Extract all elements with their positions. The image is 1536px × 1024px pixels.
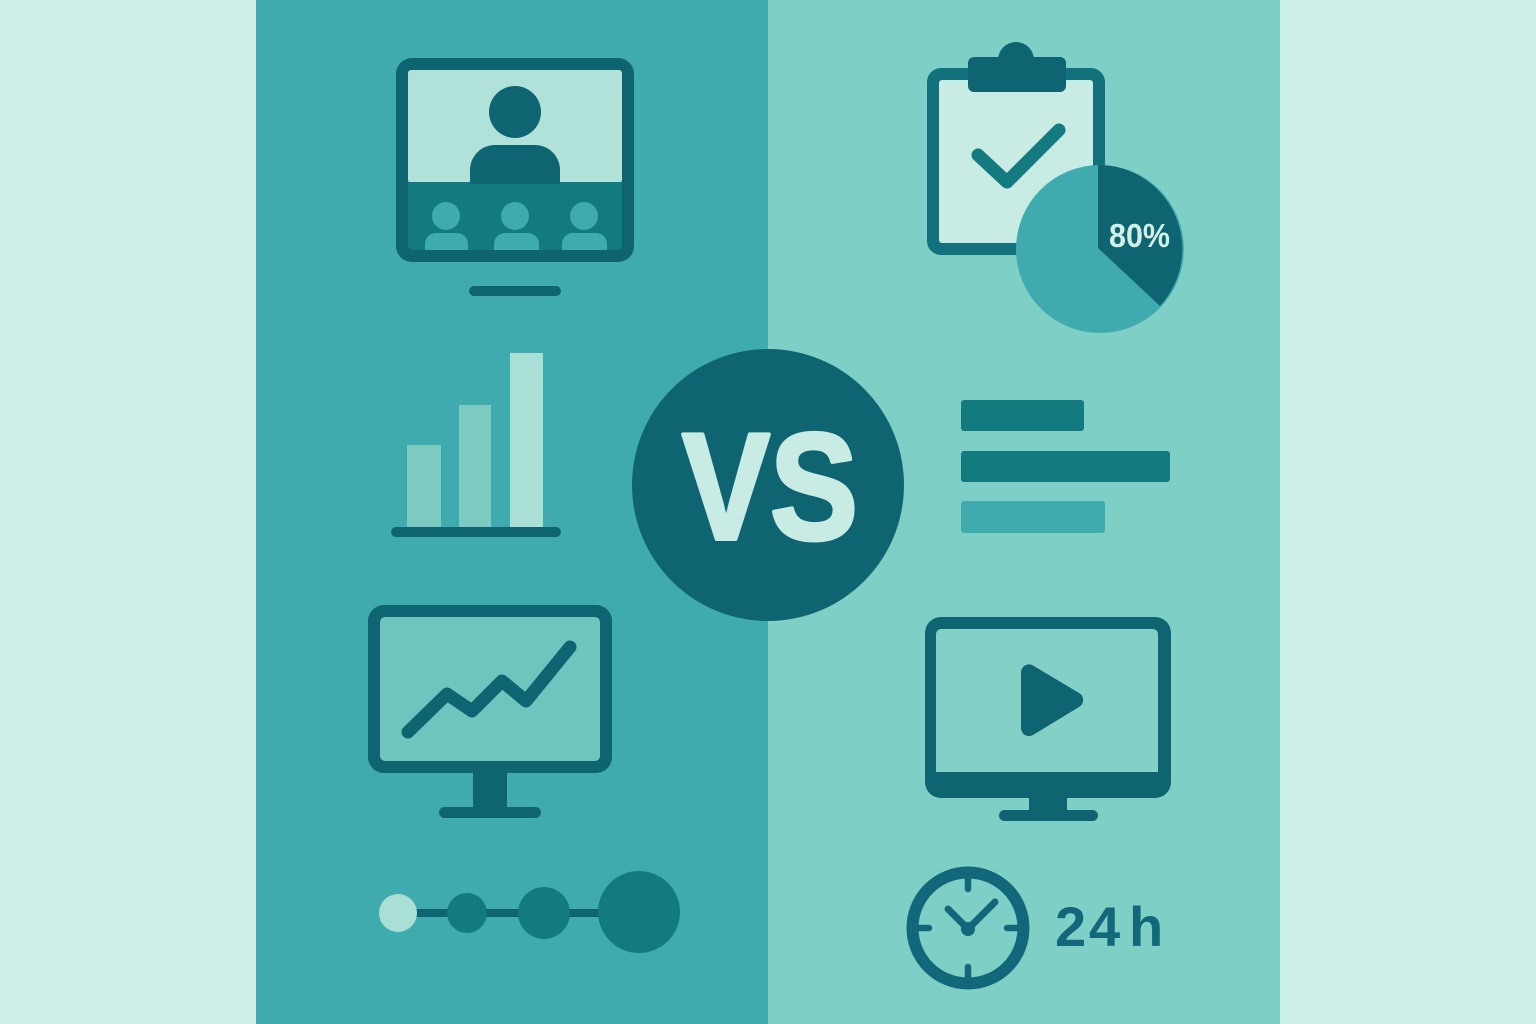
icon: video conference screen — [396, 58, 634, 296]
label: 24 h: 24 h — [1055, 895, 1163, 958]
bar chart: rising bars — [391, 353, 561, 537]
label: 80%: 80% — [1109, 217, 1170, 254]
panel: right side — [768, 0, 1280, 1024]
pie chart: 80% — [1016, 165, 1184, 333]
icon: clipboard with checkmark — [927, 42, 1105, 255]
panel: left side — [256, 0, 768, 1024]
icon: monitor with line chart — [368, 605, 612, 818]
icon: growing dots timeline — [379, 871, 680, 953]
VS badge — [632, 349, 904, 621]
icon: monitor with play button — [925, 617, 1171, 821]
horizontal bars — [961, 400, 1170, 533]
icon: clock — [912, 872, 1024, 984]
label: VS: VS — [682, 402, 858, 572]
